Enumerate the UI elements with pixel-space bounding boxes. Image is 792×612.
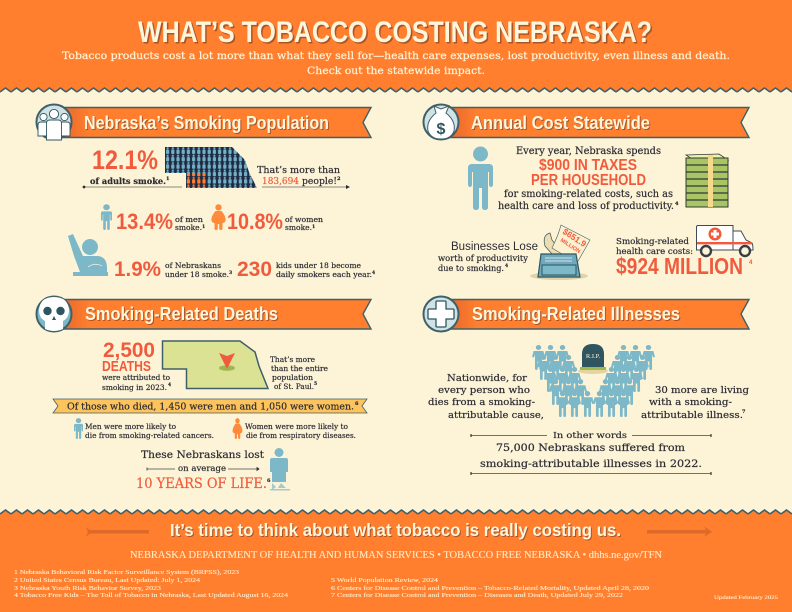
icon: money bag: $ [437, 121, 446, 138]
intro text [62, 50, 730, 77]
icon: stack of money [686, 154, 728, 207]
heading banner: smoking population [62, 108, 371, 138]
text: 30 more are living: with a smoking- [649, 397, 732, 408]
stat: women 10.8%: of women [285, 215, 323, 224]
stat: men 13.4%: of men [175, 215, 203, 224]
header band [0, 0, 792, 95]
text: businesses lose: worth of productivity [438, 254, 528, 263]
text: 30 more are living [641, 385, 749, 421]
footnotes right: 6 Centers for Disease Control and Prevention – Tobacco-Related Mortality, Updated April 28, 2020 [331, 585, 649, 592]
icon: medical cross [424, 296, 458, 332]
icon: skull [36, 296, 72, 332]
text: businesses lose: Businesses Lose [451, 241, 538, 253]
stat: men 13.4%: smoke. [175, 223, 202, 232]
text: businesses lose [438, 241, 538, 273]
note: men cancers: die from smoking-related cancers. [85, 431, 214, 440]
title: WHAT’S TOBACCO COSTING NEBRASKA? [138, 16, 652, 49]
note: women respiratory: Women were more likely to [245, 422, 348, 431]
footnotes right: 7 Centers for Disease Control and Prevention – Diseases and Death, Updated July 29, 2022 [331, 592, 623, 599]
stat: 183,694 people: 2 [337, 176, 341, 182]
text: $900 in taxes per household [498, 146, 679, 212]
text: for every person who dies [428, 373, 544, 421]
text: $924 million health care [616, 237, 753, 279]
icon: student raising hand [68, 234, 108, 276]
text: 30 more are living: 7 [742, 409, 746, 415]
icon: ambulance [696, 226, 753, 256]
stat: women 10.8%: smoke. [285, 223, 312, 232]
stat: 230 kids: kids under 18 become [276, 261, 362, 270]
stat: 1.9% under 18: under 18 smoke. [165, 270, 229, 279]
text: $900 in taxes per household: PER HOUSEHOLD [531, 172, 646, 189]
intro text: Tobacco products cost a lot more than what they sell for—health care expenses, lost productivity, even illness and death. [62, 50, 730, 62]
footer message: It’s time to think about what tobacco is really costing us. [171, 521, 622, 541]
map: Nebraska filled with people [165, 147, 257, 188]
stat: 2,500 deaths: were attributed to [102, 373, 170, 382]
icon: person fading away [270, 448, 290, 490]
text: 30 more are living: attributable illness. [641, 410, 743, 421]
footnotes left: 4 Tobacco Free Kids – The Toll of Tobacco in Nebraska, Last Updated August 16, 2024 [14, 592, 288, 599]
text: more than St. Paul: population [272, 373, 313, 382]
stat: 10 years of life: 6 [267, 478, 271, 484]
text: $924 million health care: Smoking-related [616, 237, 689, 246]
note: women respiratory [233, 418, 356, 440]
panel: Nebraska's smoking population [36, 104, 375, 281]
stat: 230 kids: 230 [237, 258, 272, 281]
stat: 1.9% under 18: 1.9% [114, 258, 161, 281]
text: more than St. Paul [270, 355, 329, 391]
heading banner: illnesses: Smoking-Related Illnesses [472, 304, 680, 324]
text: 30 more are living: 30 more are living [655, 385, 749, 396]
stat: 183,694 people: 183,694 [262, 176, 299, 187]
text: more than St. Paul: 5 [314, 381, 317, 387]
panel: smoking-related illnesses [424, 296, 749, 475]
callout: 75,000 Nebraskans: smoking-attributable illnesses in 2022. [480, 459, 702, 470]
heading banner: annual cost: Annual Cost Statewide [472, 114, 651, 134]
update date: Updated February 2025 [714, 596, 779, 601]
stat: 10 years of life: 10 YEARS OF LIFE. [136, 476, 267, 492]
heading banner: smoking population: Nebraska’s Smoking Population [85, 114, 330, 134]
stat: 230 kids [237, 258, 375, 281]
heading banner: annual cost [450, 108, 749, 138]
footnotes right [331, 578, 649, 599]
text: $900 in taxes per household: health care and loss of productivity. [498, 201, 674, 212]
icon: R.I.P. gravestone [578, 344, 608, 374]
stat: 183,694 people [257, 165, 350, 189]
icon: cash register with receipt: $651.9 [561, 226, 588, 249]
heading banner: annual cost: Annual Cost Statewide [471, 113, 650, 133]
heading banner: illnesses [450, 300, 749, 329]
stat: 183,694 people: That’s more than [257, 165, 340, 176]
heading banner: deaths: Smoking-Related Deaths [86, 305, 279, 325]
icon: money bag [424, 104, 458, 140]
icon: standing person [468, 146, 493, 210]
ribbon: men and women deaths: 6 [355, 401, 359, 407]
stat: 10 years of life: on average [178, 464, 226, 474]
stat: women 10.8%: 10.8% [227, 209, 283, 234]
stat: 12.1% of adults [83, 145, 182, 188]
text: more than St. Paul: than the entire [271, 364, 329, 373]
stat: 1.9% under 18: 3 [229, 270, 232, 276]
stat: 1.9% under 18: of Nebraskans [165, 261, 221, 270]
callout: 75,000 Nebraskans: 75,000 Nebraskans suffered from [496, 443, 686, 454]
stat: 12.1% of adults: of adults smoke. [90, 177, 166, 187]
stat: 12.1% of adults: 1 [166, 176, 169, 182]
footer arrows [86, 526, 712, 537]
stat: 12.1% of adults: 12.1% [92, 145, 158, 175]
stat: 10 years of life: These Nebraskans lost [141, 449, 265, 461]
stat: 2,500 deaths: smoking in 2023. [102, 383, 167, 392]
note: men cancers [74, 418, 214, 440]
text: $900 in taxes per household: 4 [675, 201, 679, 207]
stat: 10 years of life [136, 449, 271, 492]
text: for every person who dies: Nationwide, for [447, 373, 527, 384]
text: businesses lose: 4 [505, 263, 508, 269]
note: women respiratory: die from respiratory diseases. [246, 431, 356, 440]
text: $900 in taxes per household: for smoking-related costs, such as [504, 189, 673, 200]
footnotes left: 1 Nebraska Behavioral Risk Factor Surveillance System (BRFSS), 2023 [14, 569, 239, 576]
stat: men 13.4%: 1 [202, 224, 205, 230]
stat: 183,694 people: people! [302, 176, 337, 187]
chart: thirty people around a gravestone [532, 345, 655, 417]
title: WHAT’S TOBACCO COSTING NEBRASKA? [140, 18, 654, 50]
text: for every person who dies: attributable cause, [448, 410, 544, 421]
stat: men 13.4%: 13.4% [116, 209, 173, 234]
text: $900 in taxes per household: $900 IN TAXES [539, 157, 637, 174]
text: for every person who dies: every person who [438, 385, 530, 396]
stat: 2,500 deaths [102, 339, 171, 392]
stat: women 10.8%: 1 [312, 224, 315, 230]
icon: cash register with receipt: MILLION [559, 238, 581, 255]
text: $924 million health care: health care costs: [616, 247, 693, 256]
callout: 75,000 Nebraskans: In other words [553, 431, 627, 441]
stat: 2,500 deaths: DEATHS [102, 359, 151, 375]
footnotes right: 5 World Population Review, 2024 [331, 578, 438, 584]
intro text: Check out the statewide impact. [307, 65, 485, 77]
stat: 2,500 deaths: 2,500 [103, 339, 155, 362]
ribbon: men and women deaths: Of those who died, 1,450 were men and 1,050 were women. [67, 402, 354, 412]
footer message: It’s time to think about what tobacco is really costing us. [170, 520, 621, 540]
heading banner: deaths [62, 300, 371, 329]
panel: annual cost statewide [424, 104, 753, 280]
icon: cash register with receipt [530, 225, 590, 280]
stat: 1.9% under 18 [114, 258, 232, 281]
footer organisations: NEBRASKA DEPARTMENT OF HEALTH AND HUMAN SERVICES • TOBACCO FREE NEBRASKA • dhhs.ne.gov/TFN [130, 550, 662, 561]
map: Nebraska with marker [162, 341, 268, 388]
text: businesses lose: due to smoking. [438, 264, 504, 273]
heading banner: deaths: Smoking-Related Deaths [85, 304, 278, 324]
stat: women 10.8% [211, 204, 323, 234]
panel: smoking-related deaths [36, 296, 371, 492]
footer band [0, 509, 792, 612]
text: more than St. Paul: of St. Paul. [274, 382, 314, 391]
text: $924 million health care: 4 [749, 260, 753, 266]
note: men cancers: Men were more likely to [85, 422, 176, 431]
stat: men 13.4% [101, 204, 205, 234]
icon: R.I.P. gravestone: R.I.P. [586, 353, 601, 360]
heading banner: smoking population: Nebraska’s Smoking Population [84, 113, 329, 133]
text: $900 in taxes per household: Every year, Nebraska spends [516, 146, 661, 157]
icon: group of people [36, 104, 72, 140]
footnotes left [14, 569, 288, 599]
text: more than St. Paul: That’s more [270, 355, 316, 364]
text: $924 million health care: $924 MILLION [616, 253, 743, 279]
footnotes left: 2 United States Census Bureau, Last Updated: July 1, 2024 [14, 578, 200, 584]
footnotes left: 3 Nebraska Youth Risk Behavior Survey, 2023 [14, 586, 161, 592]
stat: 2,500 deaths: 4 [168, 382, 171, 388]
text: for every person who dies: dies from a smoking- [428, 397, 535, 408]
stat: 230 kids: 4 [372, 270, 375, 276]
callout: 75,000 Nebraskans [471, 431, 711, 475]
heading banner: illnesses: Smoking-Related Illnesses [473, 305, 681, 325]
stat: 230 kids: daily smokers each year. [276, 270, 372, 279]
